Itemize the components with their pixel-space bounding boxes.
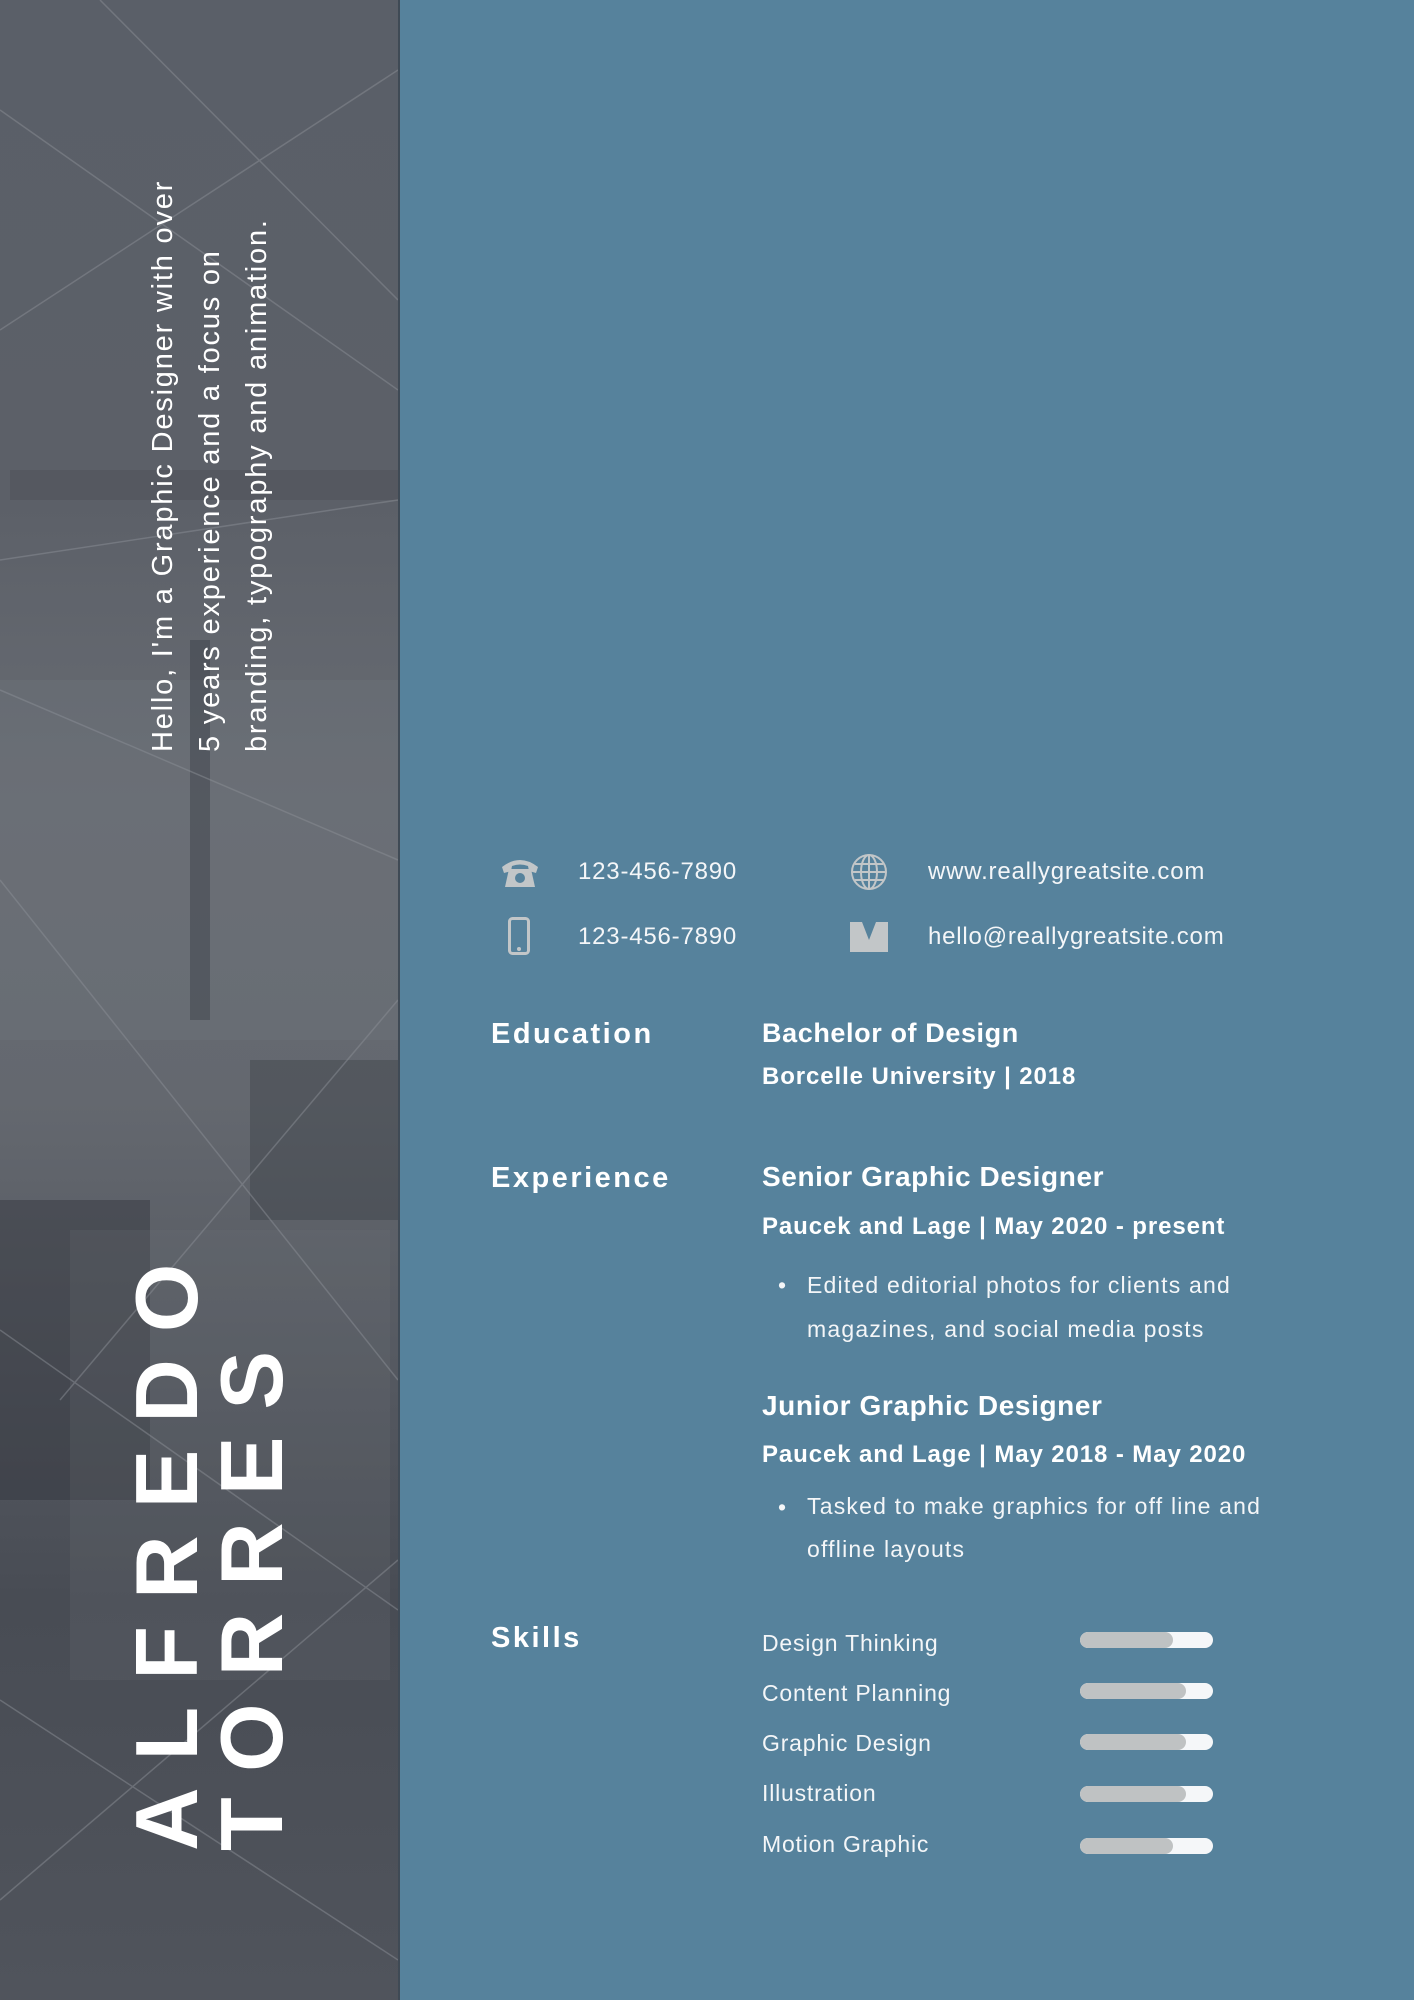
text block: junior role: Junior Graphic Designer [762,1390,1103,1421]
text block: junior role [762,1390,1261,1562]
chart: skill bars: Motion Graphic [762,1831,929,1857]
divider edge [398,0,400,2000]
text block: senior role: Paucek and Lage | May 2020 - present [762,1213,1225,1240]
title: name: TORRES [202,1324,301,1851]
text block: junior role: • [778,1494,787,1520]
text block: bio: 5 years experience and a focus on [194,249,226,752]
text block: junior role: offline layouts [807,1536,965,1562]
text block: junior role: Paucek and Lage | May 2018 - May 2020 [762,1441,1246,1468]
chart: skill bars [762,1630,951,1857]
text block: education details: Bachelor of Design [762,1018,1019,1048]
icon: telephone [502,860,538,887]
text block: bio: branding, typography and animation. [241,218,273,752]
text: phone 2: 123-456-7890 [578,923,737,950]
title: name: ALFREDO [117,1237,216,1851]
text block: bio: Hello, I'm a Graphic Designer with over [147,180,179,752]
heading: skills: Skills [491,1622,582,1654]
text: email: hello@reallygreatsite.com [928,923,1224,950]
text block: bio [147,180,273,752]
icon: globe [851,854,887,890]
text block: senior role: Senior Graphic Designer [762,1161,1104,1192]
text block: junior role: Tasked to make graphics for off line and [807,1493,1261,1519]
heading: experience: Experience [491,1162,671,1194]
icon: mobile [508,917,530,955]
text: phone 1: 123-456-7890 [578,858,737,885]
contact block [502,854,1224,955]
heading: education: Education [491,1018,654,1050]
panel: photo sidebar [0,0,398,2000]
text block: senior role: • [778,1272,787,1298]
text block: senior role: Edited editorial photos for clients and [807,1272,1231,1298]
chart: skill bars: Content Planning [762,1680,951,1706]
text block: education details [762,1018,1076,1090]
chart: skill bars: Illustration [762,1780,876,1806]
chart: skill bars: Graphic Design [762,1730,932,1756]
text block: education details: Borcelle University | 2018 [762,1063,1076,1090]
chart: skill bars: Design Thinking [762,1630,939,1656]
text block: senior role [762,1161,1231,1342]
icon: envelope [850,922,888,952]
text block: senior role: magazines, and social media posts [807,1316,1205,1342]
text: website: www.reallygreatsite.com [928,858,1205,885]
title: name [117,1237,301,1851]
